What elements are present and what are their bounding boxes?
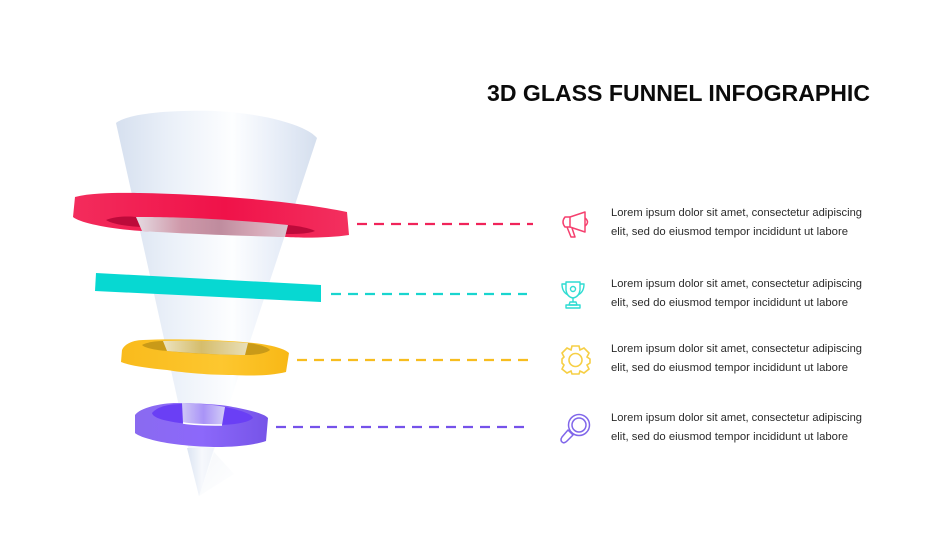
text block 3: Lorem ipsum dolor sit amet, consectetur adipiscing xyxy=(611,343,862,355)
text block 1 xyxy=(611,207,862,238)
red ring xyxy=(73,193,349,238)
connector: yellow xyxy=(297,359,528,361)
text block 2 xyxy=(611,278,862,309)
text block 2: elit, sed do eiusmod tempor incididunt ut labore xyxy=(611,297,848,309)
icon: magnifier xyxy=(561,414,590,443)
text block 1: Lorem ipsum dolor sit amet, consectetur adipiscing xyxy=(611,207,862,219)
cone tip xyxy=(187,448,214,496)
text block 3 xyxy=(611,343,862,374)
icon: megaphone xyxy=(563,212,588,237)
connector: red xyxy=(357,223,533,225)
cone tip shadow xyxy=(199,452,234,496)
text block 1: elit, sed do eiusmod tempor incididunt ut labore xyxy=(611,226,848,238)
icon: trophy xyxy=(562,282,584,308)
yellow ring xyxy=(121,339,289,376)
connector: teal xyxy=(331,293,527,295)
text block 2: Lorem ipsum dolor sit amet, consectetur adipiscing xyxy=(611,278,862,290)
funnel graphic xyxy=(73,111,349,496)
icon: gear xyxy=(562,346,590,374)
connector: purple xyxy=(276,426,527,428)
teal band xyxy=(95,273,321,302)
text block 4: Lorem ipsum dolor sit amet, consectetur adipiscing xyxy=(611,412,862,424)
glass cone xyxy=(116,111,317,496)
text block 4 xyxy=(611,412,862,443)
text block 3: elit, sed do eiusmod tempor incididunt ut labore xyxy=(611,362,848,374)
title: 3D GLASS FUNNEL INFOGRAPHIC xyxy=(487,80,870,106)
purple ring xyxy=(135,403,268,447)
text block 4: elit, sed do eiusmod tempor incididunt ut labore xyxy=(611,431,848,443)
